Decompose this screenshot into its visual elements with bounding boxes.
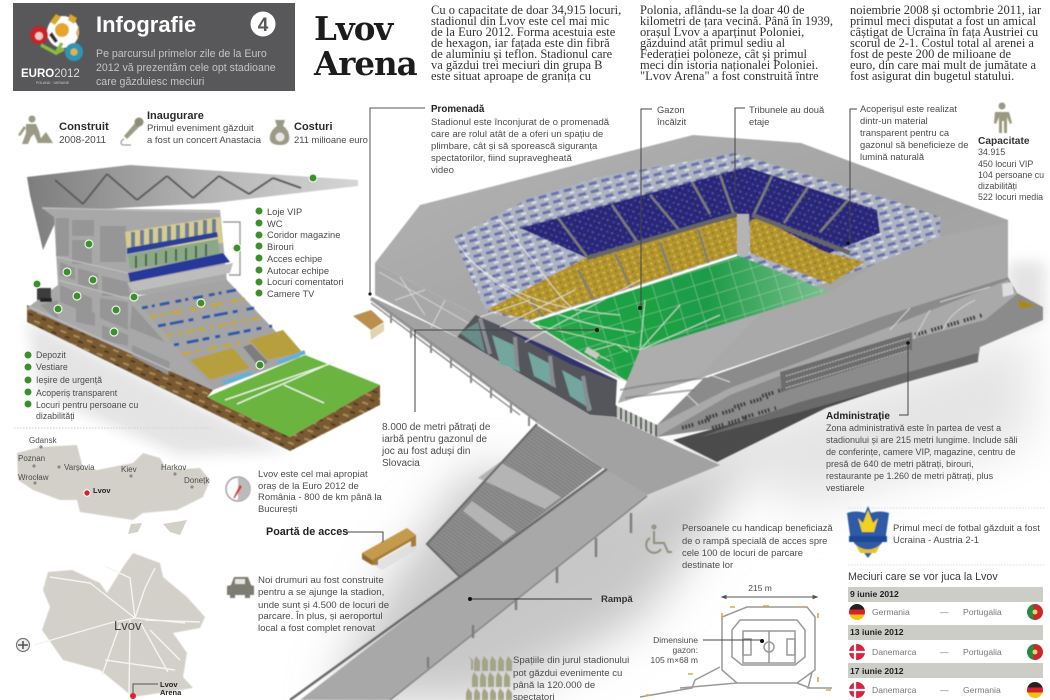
note: distance to Romania: București [258, 504, 297, 515]
intro article column 2: găzduind atât primul sediu al [640, 36, 786, 50]
icon: wheelchair [646, 526, 672, 553]
numbered markers on cutaway [33, 174, 317, 369]
fact: Construit: 2008-2011 [59, 135, 107, 146]
transparent roof panels [453, 153, 940, 350]
icon: microphone [121, 118, 144, 145]
Lvov Arena pin: Lvov [160, 680, 178, 689]
icon: Euro 2012 logo: EURO2012 [21, 68, 80, 80]
callout: transparent roof [846, 103, 968, 245]
icon: airport [16, 638, 30, 652]
legend: cutaway 1 to 8: Birouri [267, 242, 294, 252]
callout: Administrație [826, 341, 1018, 493]
callout: two-tier stands: etaje [749, 116, 769, 127]
stadium plan diagram: 215 m [748, 583, 772, 593]
callout: transparent roof: dintr-un material [860, 115, 928, 126]
fixture 9 June: Portugalia [963, 607, 1002, 617]
fixture 17 June: 17 iunie 2012 [850, 666, 904, 676]
callout: Rampă: Rampă [601, 594, 633, 605]
number badge: 4 [258, 15, 269, 36]
roof right slab over transparent roof [618, 222, 1008, 403]
stadium illustration [375, 135, 1045, 462]
stadium side shadow [1008, 262, 1045, 330]
capacity block: 450 locuri VIP [978, 159, 1033, 169]
note: roads and parking: parcare. În plus, și aeroportul [258, 611, 383, 622]
intro article column 3: scorul de 2-1. Costul total al arenei a [850, 36, 1034, 50]
intro article column 1: de hexagon, iar fațada este din fibră [431, 36, 610, 50]
Lvov Arena pin: Arena [160, 688, 182, 697]
wooden gate on plaza [353, 310, 384, 340]
callout: Promenadă: plimbare, cât și să sporească siguranța [431, 141, 598, 152]
icon: wooden gate [362, 528, 416, 570]
ramp walkway [300, 470, 647, 700]
note: distance to Romania [226, 469, 383, 515]
callout: Administrație: de conferințe, camere VIP, magazine, centru de [826, 447, 1015, 457]
callout: Promenadă: spectatorilor, fiind supravegheată [431, 153, 572, 164]
fact: Costuri: Costuri [294, 121, 332, 133]
building body [27, 208, 228, 390]
intro article column 3: fost asigurat din bugetul statului. [850, 69, 1014, 83]
callout: Administrație: vestiarele [826, 483, 865, 493]
callout: turf from Slovakia: Slovacia [382, 458, 420, 469]
fixture 9 June: — [940, 607, 949, 617]
background shading around ramp [330, 330, 1030, 700]
grass [207, 355, 380, 437]
map: Poland and Ukraine: Lvov [93, 486, 111, 495]
note: roads and parking [227, 575, 389, 634]
fact row: construction, opening, cost [18, 110, 368, 146]
icon: compass gauge [226, 477, 250, 501]
fixture 13 June: 13 iunie 2012 [850, 627, 904, 637]
callout: Administrație: stadionului și are 215 metri lungime. Include săli [826, 435, 1018, 445]
callout: two-tier stands: Tribunele au două [749, 104, 825, 115]
icon: construction worker [18, 116, 53, 144]
fixture 9 June: Germania [872, 607, 910, 617]
intro article column 3: primul meci disputat a fost un amical [850, 14, 1037, 28]
stadium entrances facade [457, 313, 617, 417]
icon: Euro 2012 logo [21, 14, 83, 85]
cutaway section of stand [27, 165, 380, 455]
fixture 13 June [848, 625, 1043, 660]
callout: turf from Slovakia: 8.000 de metri pătrați de [382, 422, 491, 433]
intro article column 2: meci din istoria naționalei Poloniei. [640, 58, 818, 72]
capacity block: 522 locuri media [978, 192, 1043, 202]
legend: cutaway 9 to 13: dizabilități [36, 411, 75, 421]
cutaway shadow [27, 320, 290, 455]
fixture 9 June: 9 iunie 2012 [850, 589, 899, 599]
callout: heated pitch [638, 104, 687, 310]
plaza under stadium [370, 297, 720, 495]
callout: Promenadă: care are rolul atât de a oferi un spațiu de [431, 129, 603, 140]
table heading: Meciuri care se vor juca la Lvov [848, 571, 998, 583]
callout: transparent roof: gazonul să beneficieze de [860, 139, 968, 150]
legend: cutaway 1 to 8: Locuri comentatori [267, 277, 343, 287]
stairs block [427, 424, 603, 577]
callout: heated pitch: încălzit [656, 116, 687, 127]
lower tribune [133, 280, 305, 390]
fixture 9 June [848, 587, 1043, 620]
callout: two-tier stands [735, 104, 825, 193]
stadium plan diagram [640, 583, 832, 697]
intro article column 1: este situat aproape de granița cu [431, 69, 592, 83]
Lvov Arena pin [130, 680, 182, 699]
legend: cutaway 9 to 13: Depozit [36, 350, 66, 360]
fact: Costuri: 211 milioane euro [294, 134, 368, 145]
lower tier: yellow seats [487, 217, 737, 320]
legend: cutaway 9 to 13: Ieșire de urgență [36, 375, 102, 385]
intro article column 3: câștigat de Ucraina în fața Austriei cu [850, 25, 1039, 39]
note: events capacity: până la 120.000 de [513, 680, 595, 691]
legend: cutaway 1 to 8: WC [267, 219, 283, 229]
note: distance to Romania: Lvov este cel mai apropiat [258, 469, 368, 480]
map: Poland and Ukraine: Varșovia [64, 463, 95, 472]
callout: Administrație: Administrație [826, 411, 890, 422]
fixture 17 June [848, 663, 1043, 698]
callout: Promenadă [368, 104, 610, 296]
fact: Inaugurare: a fost un concert Anastacia [147, 135, 262, 146]
map: Poland and Ukraine: Gdansk [29, 436, 58, 445]
map: Poland and Ukraine [17, 436, 210, 535]
legend: cutaway 1 to 8: Coridor magazine [267, 230, 340, 240]
fact: Inaugurare: Primul eveniment găzduit [147, 123, 254, 134]
ground layer [27, 305, 380, 451]
intro article column 1: va găzdui trei meciuri din grupa B [431, 58, 602, 72]
note: roads and parking: local a fost complet renovat [258, 623, 375, 634]
callout: Promenadă: Stadionul este înconjurat de o promenadă [431, 117, 610, 128]
right-hand admin building [615, 277, 1043, 462]
map: Lvov city [16, 553, 205, 699]
map: Lvov city: Lvov [114, 618, 142, 633]
stadium plan diagram: 105 m×68 m [650, 655, 698, 665]
legend: cutaway 9 to 13: Acoperiș transparent [36, 388, 118, 398]
number badge [250, 12, 276, 36]
capacity block: 34.915 [978, 147, 1005, 157]
intro article column 2: "Lvov Arena" a fost construită între [640, 69, 819, 83]
note: accessibility: Persoanele cu handicap beneficiază [682, 522, 833, 533]
callout: turf from Slovakia: joc au fost aduși din [381, 446, 470, 457]
icon: person [994, 102, 1012, 133]
intro article column 1: stadionul din Lvov este cel mai mic [431, 14, 610, 28]
note: events capacity: pot găzdui evenimente cu [513, 668, 622, 679]
callout: Rampă [468, 594, 633, 605]
central stair tower [737, 214, 749, 254]
map: Poland and Ukraine: Donețk [184, 476, 210, 485]
legend: cutaway 9 to 13 [24, 350, 138, 421]
icon: car [227, 577, 254, 598]
upper tier: blue seats [520, 167, 880, 258]
callout: Administrație: presă de 640 de metri pătrați, birouri, [826, 459, 974, 469]
fact: Construit: Construit [59, 121, 109, 133]
intro article column 3: fost de peste 200 de milioane de [850, 47, 1012, 61]
note: accessibility: de o rampă specială de acces spre [682, 535, 827, 546]
note: roads and parking: Noi drumuri au fost construite [258, 575, 384, 586]
map: Poland and Ukraine: Wrocław [18, 473, 49, 482]
left side band [375, 263, 480, 337]
fixture 17 June: Danemarca [872, 685, 917, 695]
ramp pillars [428, 513, 631, 668]
legend: cutaway 1 to 8: Autocar echipe [267, 266, 329, 276]
Ukraine federation crest and first match: Primul meci de fotbal găzduit a fost [893, 523, 1040, 534]
transparent roof structure [27, 165, 358, 250]
header description: care găzduiesc meciuri [96, 76, 204, 88]
ramp and plaza [290, 297, 720, 700]
fixture 13 June: Portugalia [963, 647, 1002, 657]
callout: transparent roof: lumină naturală [860, 151, 925, 162]
capacity block [978, 102, 1044, 202]
Ukraine federation crest and first match: Ucraina - Austria 2-1 [893, 535, 979, 546]
header title: Infografie [96, 12, 196, 37]
icon: Euro 2012 logo: POLAND · UKRAINE [36, 81, 70, 85]
intro article column 2: Polonia, aflându-se la doar 40 de [640, 3, 805, 17]
callout: access gate [266, 526, 416, 570]
fact: Inaugurare: Inaugurare [147, 110, 204, 122]
intro article column 2: Federației poloneze, cât și primul [640, 47, 807, 61]
callout: transparent roof: transparent pentru ca [860, 127, 950, 138]
fixture 13 June: Danemarca [872, 647, 917, 657]
icon: crowd [466, 656, 512, 700]
intro article column 3: euro, din care mai mult de jumătate a [850, 58, 1036, 72]
fixture 17 June: — [940, 685, 949, 695]
team coach [37, 288, 52, 302]
note: events capacity [466, 655, 629, 700]
note: events capacity: Spațiile din jurul stadionului [513, 655, 629, 666]
stadium plan diagram: Dimensiune [653, 635, 698, 645]
note: accessibility [646, 522, 833, 570]
intro article column 1: de aluminiu și teflon. Stadionul care [431, 47, 613, 61]
fixture 13 June: — [940, 647, 949, 657]
note: roads and parking: pentru a se ajunge la stadion, [258, 587, 384, 598]
map: Poland and Ukraine: Poznan [18, 454, 45, 463]
callout: Administrație: restaurante pe 1.260 de metri pătrați, plus [826, 471, 994, 481]
callout: heated pitch: Gazon [657, 104, 685, 115]
capacity block: 104 persoane cu [978, 170, 1044, 180]
callout: Promenadă: video [431, 165, 454, 176]
header description: 2012 vă prezentăm cele opt stadioane [96, 62, 276, 74]
stadium plan diagram: gazon: [672, 645, 698, 655]
advertising boards [223, 352, 305, 383]
icon: money bag [270, 120, 289, 145]
callout: access gate: Poartă de acces [266, 526, 348, 538]
bracket for TV cameras [223, 222, 240, 275]
hospitality facade with boxes [125, 217, 233, 292]
legend: cutaway 1 to 8 [256, 207, 343, 299]
callout: Administrație: Zona administrativă este în partea de vest a [826, 423, 1001, 433]
note: accessibility: cele 100 de locuri de parcare [682, 547, 803, 558]
icon: Ukraine football crest [847, 506, 889, 558]
note: distance to Romania: oraș de la Euro 2012 de [258, 481, 359, 492]
main title: Lvov [314, 9, 394, 48]
promenade rail [371, 298, 537, 426]
intro article column 2: orașul Lvov a aparținut Poloniei, [640, 25, 804, 39]
roof structure lines [455, 220, 760, 405]
legend: cutaway 1 to 8: Camere TV [267, 289, 315, 299]
note: roads and parking: unde sunt și 4.500 de locuri de [258, 600, 389, 611]
callout: Promenadă: Promenadă [431, 104, 485, 115]
legend: cutaway 9 to 13: Locuri pentru persoane cu [36, 400, 138, 410]
intro article column 1: Cu o capacitate de doar 34,915 locuri, [431, 3, 621, 17]
map: Poland and Ukraine: Kiev [121, 465, 137, 474]
note: distance to Romania: România - 800 de km până la [258, 492, 383, 503]
header description: Pe parcursul primelor zile de la Euro [96, 48, 267, 60]
fixture 17 June: Germania [963, 685, 1001, 695]
legend: cutaway 1 to 8: Acces echipe [267, 254, 322, 264]
fixtures table [848, 571, 1043, 698]
legend: cutaway 9 to 13: Vestiare [36, 362, 68, 372]
note: accessibility: destinate lor [682, 559, 733, 570]
callout: turf from Slovakia [381, 328, 599, 469]
callout: transparent roof: Acoperișul este realizat [860, 103, 957, 114]
capacity block: Capacitate [978, 136, 1030, 147]
legend: cutaway 1 to 8: Loje VIP [267, 207, 302, 217]
Ukraine federation crest and first match [847, 506, 1040, 558]
header panel: Infografie [13, 3, 295, 91]
capacity block: dizabilități [978, 181, 1017, 191]
roof deck [375, 135, 1008, 403]
intro article column 3: noiembrie 2008 și octombrie 2011, iar [850, 3, 1042, 17]
pitch [530, 255, 830, 382]
map: Poland and Ukraine: Harkov [161, 463, 186, 472]
main title: Arena [313, 44, 418, 83]
intro article column 1: de la Euro 2012. Forma acestuia este [431, 25, 616, 39]
intro article column 2: kilometri de țara vecină. Până în 1939, [640, 14, 833, 28]
yellow seat blocks [190, 348, 250, 380]
callout: turf from Slovakia: iarbă pentru gazonul de [382, 434, 488, 445]
